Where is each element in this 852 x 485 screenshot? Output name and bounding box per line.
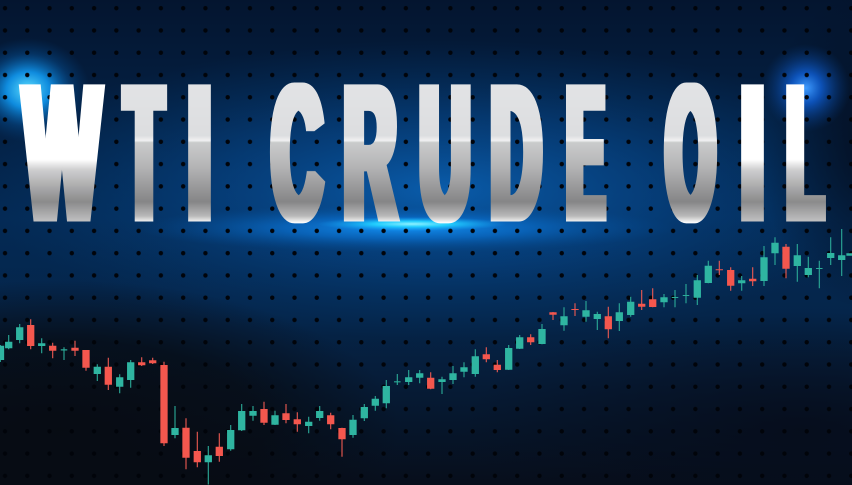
red wicks xyxy=(31,244,786,469)
teal bodies xyxy=(0,243,850,462)
candlestick chart xyxy=(0,229,850,484)
thin teal bodies xyxy=(64,268,819,382)
title: WTI CRUDE OIL: R xyxy=(344,45,396,260)
title: WTI CRUDE OIL: I xyxy=(740,45,764,260)
glow: top right xyxy=(750,40,852,140)
title: WTI CRUDE OIL: T xyxy=(125,45,163,260)
red bodies xyxy=(31,247,786,462)
title: WTI CRUDE OIL: C xyxy=(272,45,322,260)
title: WTI CRUDE OIL: I xyxy=(188,45,212,260)
light flare under title xyxy=(130,200,682,255)
glow: top left xyxy=(0,0,100,150)
title: WTI CRUDE OIL: U xyxy=(420,45,470,260)
title: WTI CRUDE OIL: D xyxy=(491,45,541,260)
title: WTI CRUDE OIL: O xyxy=(666,45,715,260)
teal wicks xyxy=(0,229,842,484)
title: WTI CRUDE OIL: W xyxy=(24,45,100,260)
title: WTI CRUDE OIL: E xyxy=(567,45,604,260)
